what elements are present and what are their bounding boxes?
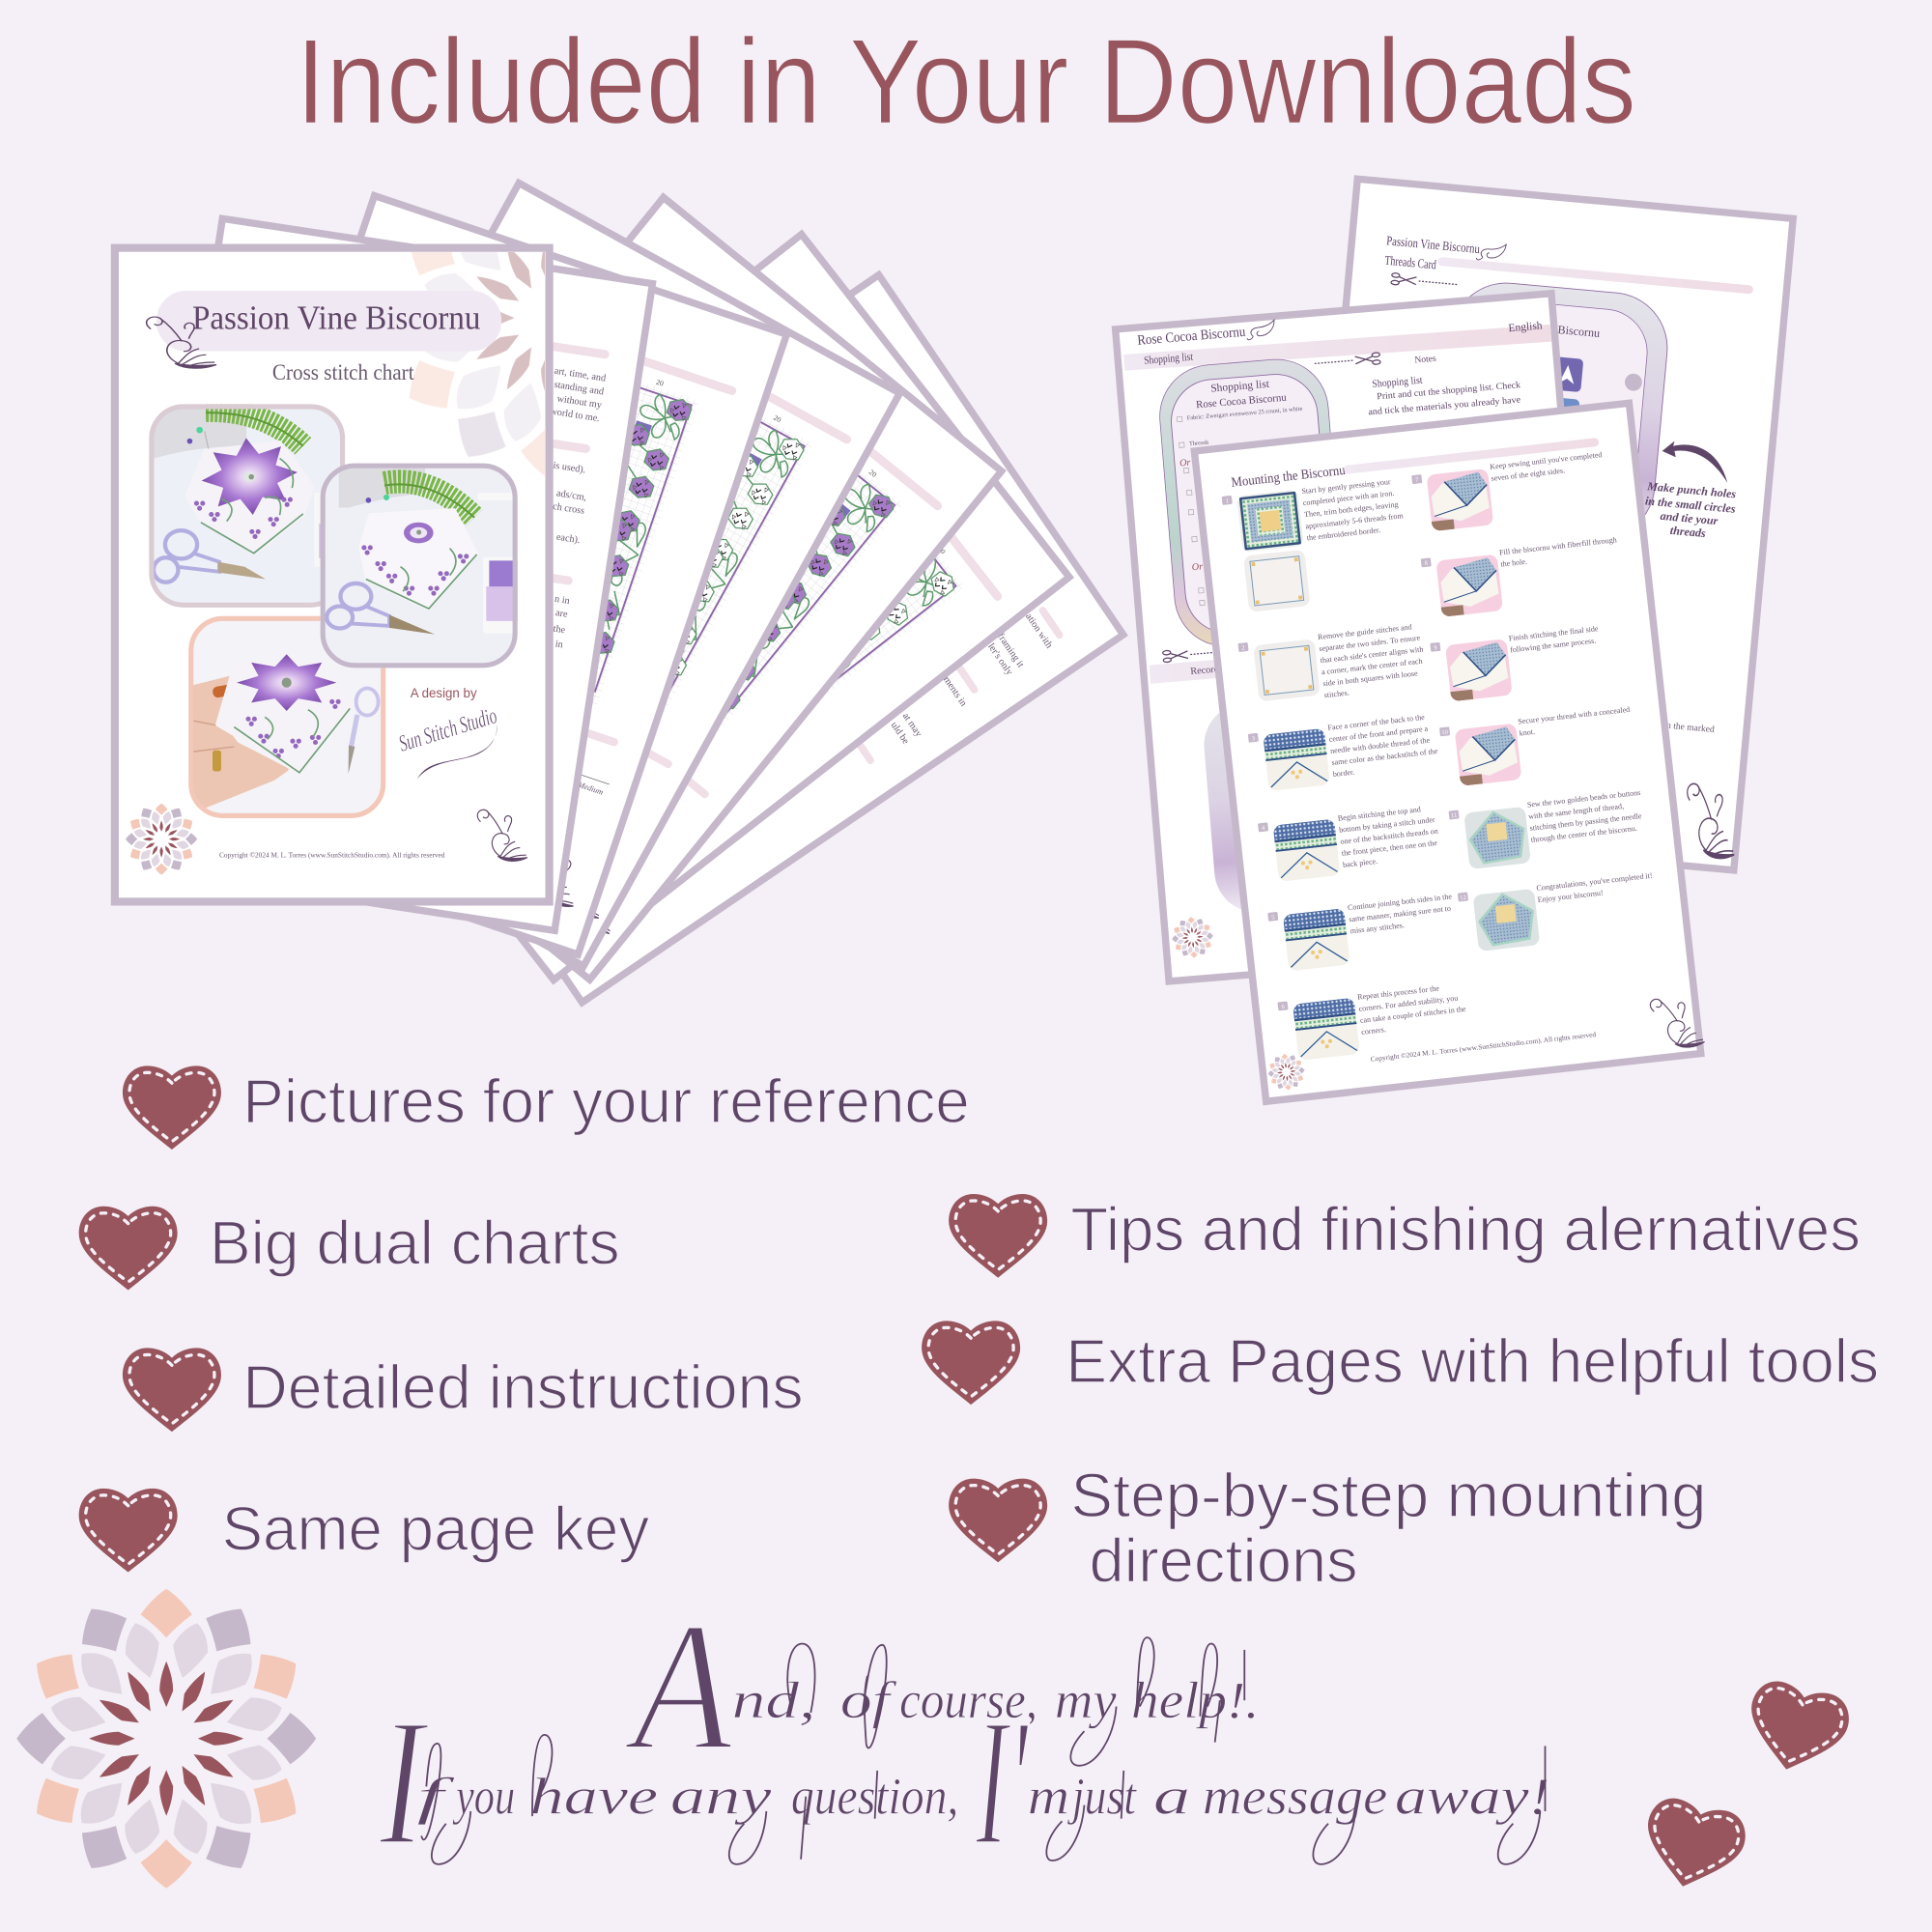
item: charts [79, 1207, 620, 1290]
step 3: center of the front and prepare a [1328, 724, 1429, 744]
page 5: chart page [286, 235, 1069, 980]
step 5: same manner, making sure not to [1349, 904, 1451, 923]
page 4: chart page [252, 197, 1002, 980]
page: threads card (back): n the marked [1666, 721, 1715, 735]
step 1: 1 [1225, 497, 1229, 505]
item: key [79, 1489, 649, 1573]
step 11 [1448, 788, 1647, 871]
step 12: Congratulations, you've completed it! [1536, 871, 1653, 893]
page 1: intro text page: without my [556, 393, 604, 411]
small mandala logo [126, 804, 197, 875]
page 6: instruction text page: ments in [941, 674, 969, 708]
line 1: A [624, 1585, 733, 1789]
step 8: 8 [1424, 560, 1428, 567]
step 9 [1430, 624, 1605, 703]
step 11: with the same length of thread, [1528, 802, 1624, 821]
step 3: 3 [1252, 735, 1255, 742]
step 6 [1277, 981, 1470, 1063]
decorative heart bottom [1635, 1793, 1751, 1898]
page 6: instruction text page [338, 275, 1123, 1003]
line 2: have [529, 1768, 658, 1826]
step 12: 12 [1460, 895, 1466, 901]
step 11: through the center of the biscornu. [1530, 824, 1637, 844]
page 1: intro text page: n in [554, 594, 570, 607]
step 6: corners. For added stability, you [1358, 994, 1459, 1013]
step 10 [1439, 705, 1636, 788]
item: pictures: Pictures for your reference [242, 1066, 970, 1136]
page 1: intro text page: ads/cm, [555, 488, 587, 503]
photo 2: biscornu with thread [321, 464, 518, 668]
photo 1: biscornu with star [149, 404, 345, 608]
notes: Print and cut the shopping list. Check [1377, 380, 1521, 402]
shopping list card: Shopping list [1210, 379, 1270, 395]
step 12 [1458, 871, 1659, 953]
step 7: Keep sewing until you've completed [1490, 450, 1603, 471]
page: shopping list (middle) [1116, 294, 1605, 981]
item: charts: Big dual charts [210, 1208, 620, 1278]
shopping list card [1155, 355, 1348, 650]
script swashes [421, 1637, 1545, 1864]
line 2: just [1067, 1768, 1137, 1826]
step 6: Repeat this process for the [1357, 983, 1440, 1002]
step 3: needle with double thread of the [1330, 736, 1431, 755]
page 6: instruction text page: at may [900, 711, 924, 740]
step 8: the hole. [1500, 557, 1527, 569]
step 4: bottom by taking a stitch under [1339, 815, 1435, 835]
note: punch holes: and tie your [1660, 509, 1719, 527]
line 1: of [840, 1671, 898, 1729]
photo 3: biscornu in hand [188, 616, 385, 818]
item: mounting: Step-by-step mounting [1070, 1461, 1707, 1530]
step 5: miss any stitches. [1350, 921, 1405, 935]
step 11: stitching them by passing the needle [1529, 811, 1642, 833]
step 1: the embroidered border. [1306, 526, 1381, 542]
page 2: chart page [166, 196, 786, 954]
line 2: a [1153, 1768, 1190, 1826]
designer credit: A design by [411, 685, 477, 700]
closing script message [379, 1585, 1550, 1883]
page 1: intro text page: the [553, 624, 566, 636]
line 2: any [670, 1768, 772, 1826]
step 1: Start by gently pressing your [1301, 477, 1391, 496]
page 1: intro text page: is used). [553, 461, 586, 475]
line 2: m [1028, 1768, 1069, 1826]
note: punch holes: Make punch holes [1646, 479, 1737, 501]
step 10: 10 [1441, 729, 1448, 736]
flourish beside title [147, 317, 216, 368]
record band: Record [1190, 665, 1219, 677]
step 11: Sew the two golden beads or buttons [1526, 788, 1641, 810]
arrow to punch holes [1662, 441, 1727, 483]
page 1: intro text page [125, 218, 652, 930]
item: instructions [123, 1348, 804, 1432]
step 2: stitches. [1323, 688, 1350, 699]
flourish [1650, 994, 1705, 1051]
page 2: chart page: Medium [576, 780, 605, 797]
step 2: that each side's center aligns with [1320, 644, 1424, 665]
step 2: side in both squares with loose [1322, 668, 1418, 688]
cover title pill: Passion Vine Biscornu [192, 300, 480, 337]
record band [1150, 630, 1577, 684]
step 5 [1267, 892, 1459, 973]
decorative heart top [1739, 1676, 1855, 1781]
step 2: separate the two sides. To ensure [1319, 634, 1421, 653]
page 1: intro text page: world to me. [550, 407, 601, 424]
sub heading: Threads Card [1384, 253, 1437, 271]
designer credit: Sun Stitch Studio [396, 702, 500, 757]
item: instructions: Detailed instructions [242, 1352, 804, 1422]
line 2: away! [1395, 1768, 1550, 1826]
line 2: f [416, 1768, 457, 1826]
step 2: a corner, mark the center of each [1321, 657, 1423, 676]
feature list: right column [922, 1194, 1879, 1596]
notes: Shopping list [1372, 375, 1423, 390]
page 6: instruction text page: uld be [889, 721, 911, 747]
step 2: Remove the guide stitches and [1318, 622, 1412, 641]
designer credit [396, 685, 500, 780]
step 9: Finish stitching the final side [1508, 624, 1599, 642]
shopping list card: Or [1191, 561, 1204, 573]
threads card frame: Biscornu [1557, 323, 1601, 340]
cover title pill [156, 291, 501, 352]
step 9: 9 [1434, 644, 1437, 652]
faded mandala corner [410, 252, 545, 475]
step 2 [1237, 621, 1428, 708]
cover page: Passion Vine Biscornu [115, 157, 709, 901]
notes [1364, 347, 1522, 417]
step 11: 11 [1451, 812, 1458, 819]
step 3: Face a corner of the back to the [1327, 713, 1426, 732]
page: mounting the biscornu (front) [1194, 403, 1706, 1101]
shopping list card: Threads [1189, 440, 1209, 447]
cover subtitle: Cross stitch chart [272, 360, 414, 384]
small mandala logo [1266, 1052, 1307, 1093]
step 4: one of the backstitch threads on [1340, 827, 1438, 846]
page 6: instruction text page: ation with [1023, 611, 1054, 650]
line 2: I [379, 1681, 430, 1883]
notes: and tick the materials you already have [1368, 394, 1520, 417]
line 1: nd, [732, 1671, 815, 1729]
note: punch holes: in the small circles [1644, 494, 1736, 516]
large mandala [16, 1589, 316, 1889]
line 1: my [1055, 1671, 1117, 1729]
copyright: Copyright ©2024 M. L. Torres (www.SunStitchStudio.com). All rights reserved [1370, 1031, 1597, 1064]
item: mounting [949, 1461, 1707, 1596]
line 2: question, [791, 1768, 958, 1826]
step 1: completed piece with an iron. [1302, 489, 1395, 507]
copyright: Copyright ©2024 M. L. Torres (www.SunStitchStudio.com). All rights reserved [219, 852, 445, 860]
page: threads card (back) [1298, 179, 1793, 870]
line 1: help!. [1131, 1671, 1260, 1729]
title: Included in Your Downloads [296, 15, 1636, 150]
page 6: instruction text page: framing it [995, 632, 1026, 669]
step 1: approximately 5-6 threads from [1305, 511, 1405, 530]
step 3: same color as the backstitch of the [1331, 747, 1438, 767]
heading: Rose Cocoa Biscornu [1137, 325, 1246, 349]
fan of chart pages [125, 184, 1123, 1003]
shopping list card: Or [1179, 458, 1191, 469]
step 4: 4 [1262, 825, 1265, 832]
notes: Notes [1414, 354, 1436, 366]
step 5: Continue joining both sides in the [1348, 892, 1453, 912]
threads card frame [1434, 278, 1672, 543]
page 3: chart page [203, 184, 899, 966]
page 1: intro text page: each). [555, 532, 581, 546]
page 1: intro text page: in [554, 639, 564, 650]
step 8 [1420, 535, 1623, 619]
step 4: back piece. [1343, 857, 1378, 869]
item: extra pages: Extra Pages with helpful tools [1065, 1326, 1879, 1396]
shopping list card: Fabric: Zweigart evenweave 25 count, in white [1186, 406, 1303, 422]
page 1: intro text page: are [554, 608, 569, 620]
step 8: Fill the biscornu with fiberfill through [1499, 535, 1617, 557]
step 6: 6 [1281, 1004, 1285, 1010]
page 1: intro text page: standing and [554, 380, 605, 397]
line 2: message [1203, 1768, 1387, 1826]
line 1: course, [899, 1671, 1037, 1729]
step 3 [1248, 712, 1440, 793]
step 4: the front piece, then one on the [1341, 838, 1438, 858]
step 1: Then, trim both edges, leaving [1304, 500, 1399, 519]
step 10: knot. [1519, 727, 1535, 738]
step 6: corners. [1361, 1025, 1386, 1037]
sub heading: Shopping list [1144, 352, 1194, 367]
step 3: border. [1332, 768, 1355, 779]
line 2: you [452, 1768, 515, 1826]
note: punch holes [1642, 479, 1738, 543]
page: shopping list (middle): English [1508, 320, 1543, 334]
step 5: 5 [1271, 914, 1275, 922]
step 1 [1222, 476, 1412, 614]
step 10: Secure your thread with a concealed [1518, 705, 1631, 726]
feature list: left column [79, 1065, 970, 1573]
page 1: intro text page: ch cross [552, 501, 585, 517]
shopping list card: Rose Cocoa Biscornu [1196, 392, 1288, 411]
heading: Passion Vine Biscornu [1386, 233, 1481, 256]
step 2: 2 [1241, 644, 1245, 652]
page 6: instruction text page: ler's only [985, 641, 1015, 678]
step 4: Begin stitching the top and [1337, 805, 1421, 823]
note: punch holes: threads [1669, 524, 1707, 540]
item: mounting: directions [1090, 1526, 1358, 1596]
heading: Mounting the Biscornu [1231, 463, 1346, 491]
step 12: Enjoy your biscornu! [1537, 889, 1604, 904]
item: key: Same page key [222, 1494, 649, 1564]
step 4 [1258, 804, 1441, 884]
small mandala logo [1171, 915, 1215, 959]
step 9: following the same process. [1510, 637, 1597, 654]
flourish [477, 810, 527, 861]
step 7: 7 [1415, 477, 1419, 484]
step 7: seven of the eight sides. [1491, 466, 1565, 483]
second card [1201, 692, 1403, 916]
page 1: intro text page: art, time, and [554, 366, 607, 384]
step 7 [1411, 450, 1608, 533]
step 6: can take a couple of stitches in the [1359, 1005, 1466, 1025]
line 2: I' [976, 1681, 1029, 1883]
item: tips: Tips and finishing alernatives [1070, 1195, 1861, 1264]
